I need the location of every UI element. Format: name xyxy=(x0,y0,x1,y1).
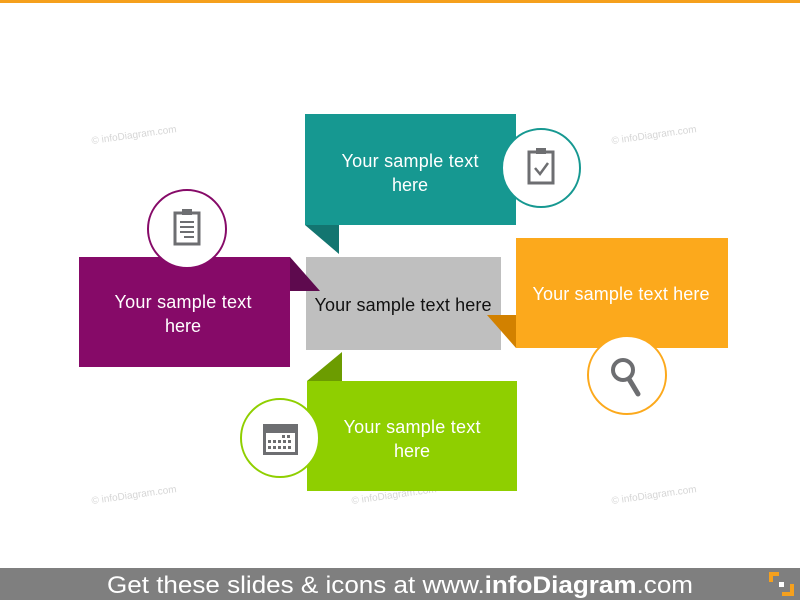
icon: calendar xyxy=(241,399,319,477)
panel: purple: Your sample text xyxy=(114,292,252,312)
panel: teal xyxy=(305,114,516,254)
icon: teal clipboard check xyxy=(502,129,580,207)
footer xyxy=(0,568,800,600)
watermarks: © infoDiagram.com xyxy=(91,484,177,507)
watermarks: © infoDiagram.com xyxy=(611,124,697,147)
panel: green: here xyxy=(394,441,430,461)
icon: magnifier xyxy=(588,336,666,414)
panel: orange: Your sample text here xyxy=(532,284,710,304)
icon: purple clipboard xyxy=(148,190,226,268)
watermarks: © infoDiagram.com xyxy=(611,484,697,507)
panel: green xyxy=(307,352,517,491)
panel: orange xyxy=(487,238,728,348)
watermarks xyxy=(91,124,697,507)
watermarks: © infoDiagram.com xyxy=(351,484,437,507)
panel: purple: here xyxy=(165,316,201,336)
panel: teal: Your sample text xyxy=(342,151,478,171)
panel: green: Your sample text xyxy=(344,417,480,437)
footer: Get these slides & icons at www. infoDiagram .com xyxy=(107,572,693,599)
panel: teal: here xyxy=(392,175,428,195)
panel: gray center xyxy=(306,257,501,350)
panel: purple xyxy=(79,257,320,367)
panel: gray center: Your sample text here xyxy=(314,295,492,315)
watermarks: © infoDiagram.com xyxy=(91,124,177,147)
